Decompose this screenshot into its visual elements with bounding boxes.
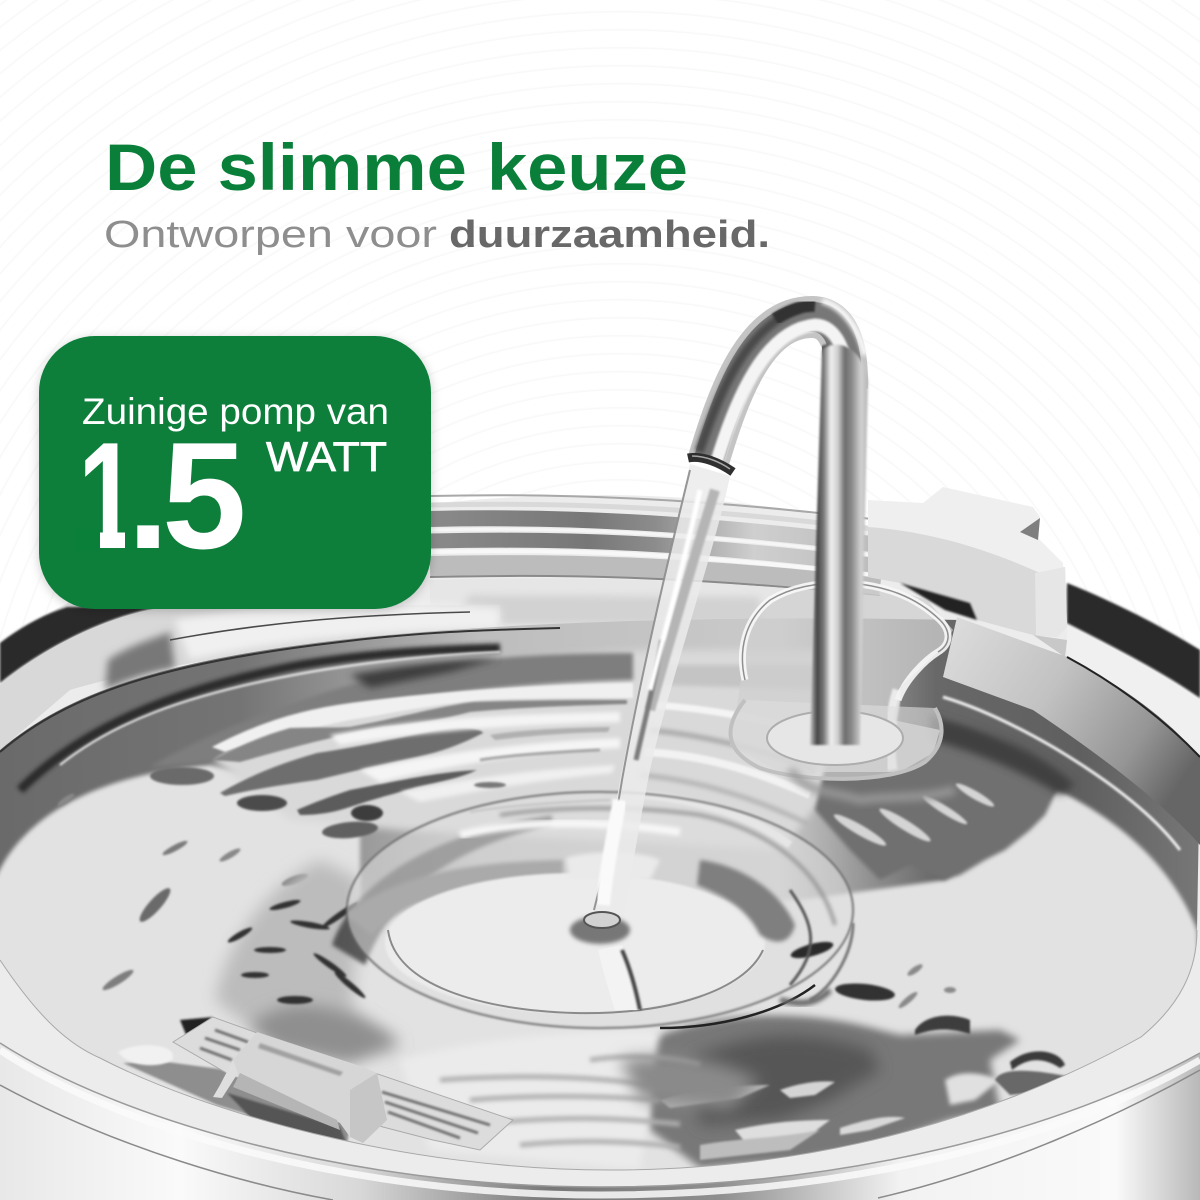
light band, left side bbox=[0, 605, 500, 750]
dark outer band, right side bbox=[1067, 583, 1200, 698]
dark outer band, left side bbox=[0, 606, 170, 683]
bowl rim with metal bands bbox=[0, 495, 1200, 1187]
transparent filter holder bbox=[730, 582, 955, 800]
callout number: .5 bbox=[127, 411, 247, 581]
left dark ring lines bbox=[20, 648, 500, 790]
bottom light ripples bbox=[400, 1030, 660, 1170]
left turbulent ripple bbox=[215, 860, 400, 1060]
upper ripple area bbox=[212, 650, 830, 850]
floating filter grid bbox=[173, 1017, 513, 1150]
callout label: Zuinige pomp van bbox=[82, 391, 389, 432]
title: De slimme keuze bbox=[105, 130, 688, 204]
water stream bbox=[570, 464, 730, 1010]
subtitle: Ontworpen voor bbox=[104, 214, 437, 256]
photo: stainless steel water fountain bowl bbox=[0, 495, 1200, 1200]
pool under filter bbox=[123, 1062, 350, 1145]
lip edge lines bbox=[0, 930, 1197, 1170]
callout number: 1 bbox=[78, 410, 137, 580]
water surface bbox=[0, 650, 1200, 1190]
bright bottom reflection bbox=[0, 765, 1200, 1190]
fountain clip housing bbox=[868, 487, 1067, 657]
right shadow bbox=[813, 748, 1058, 882]
callout unit: WATT bbox=[266, 433, 387, 480]
bowl outer body bbox=[0, 1000, 1200, 1200]
inner bowl wall bbox=[0, 618, 1200, 1170]
callout number bbox=[76, 410, 247, 581]
callout: pump wattage bbox=[39, 336, 431, 609]
subtitle bbox=[104, 214, 770, 256]
bottom dark reflection bbox=[650, 1016, 1020, 1168]
steel spout pipe bbox=[688, 301, 868, 745]
water ring around centre bbox=[347, 792, 853, 1028]
steel band, right side bbox=[943, 617, 1200, 845]
subtitle: duurzaamheid. bbox=[449, 214, 770, 256]
callout panel bbox=[39, 336, 431, 609]
dark blobs on left side bbox=[56, 767, 506, 993]
